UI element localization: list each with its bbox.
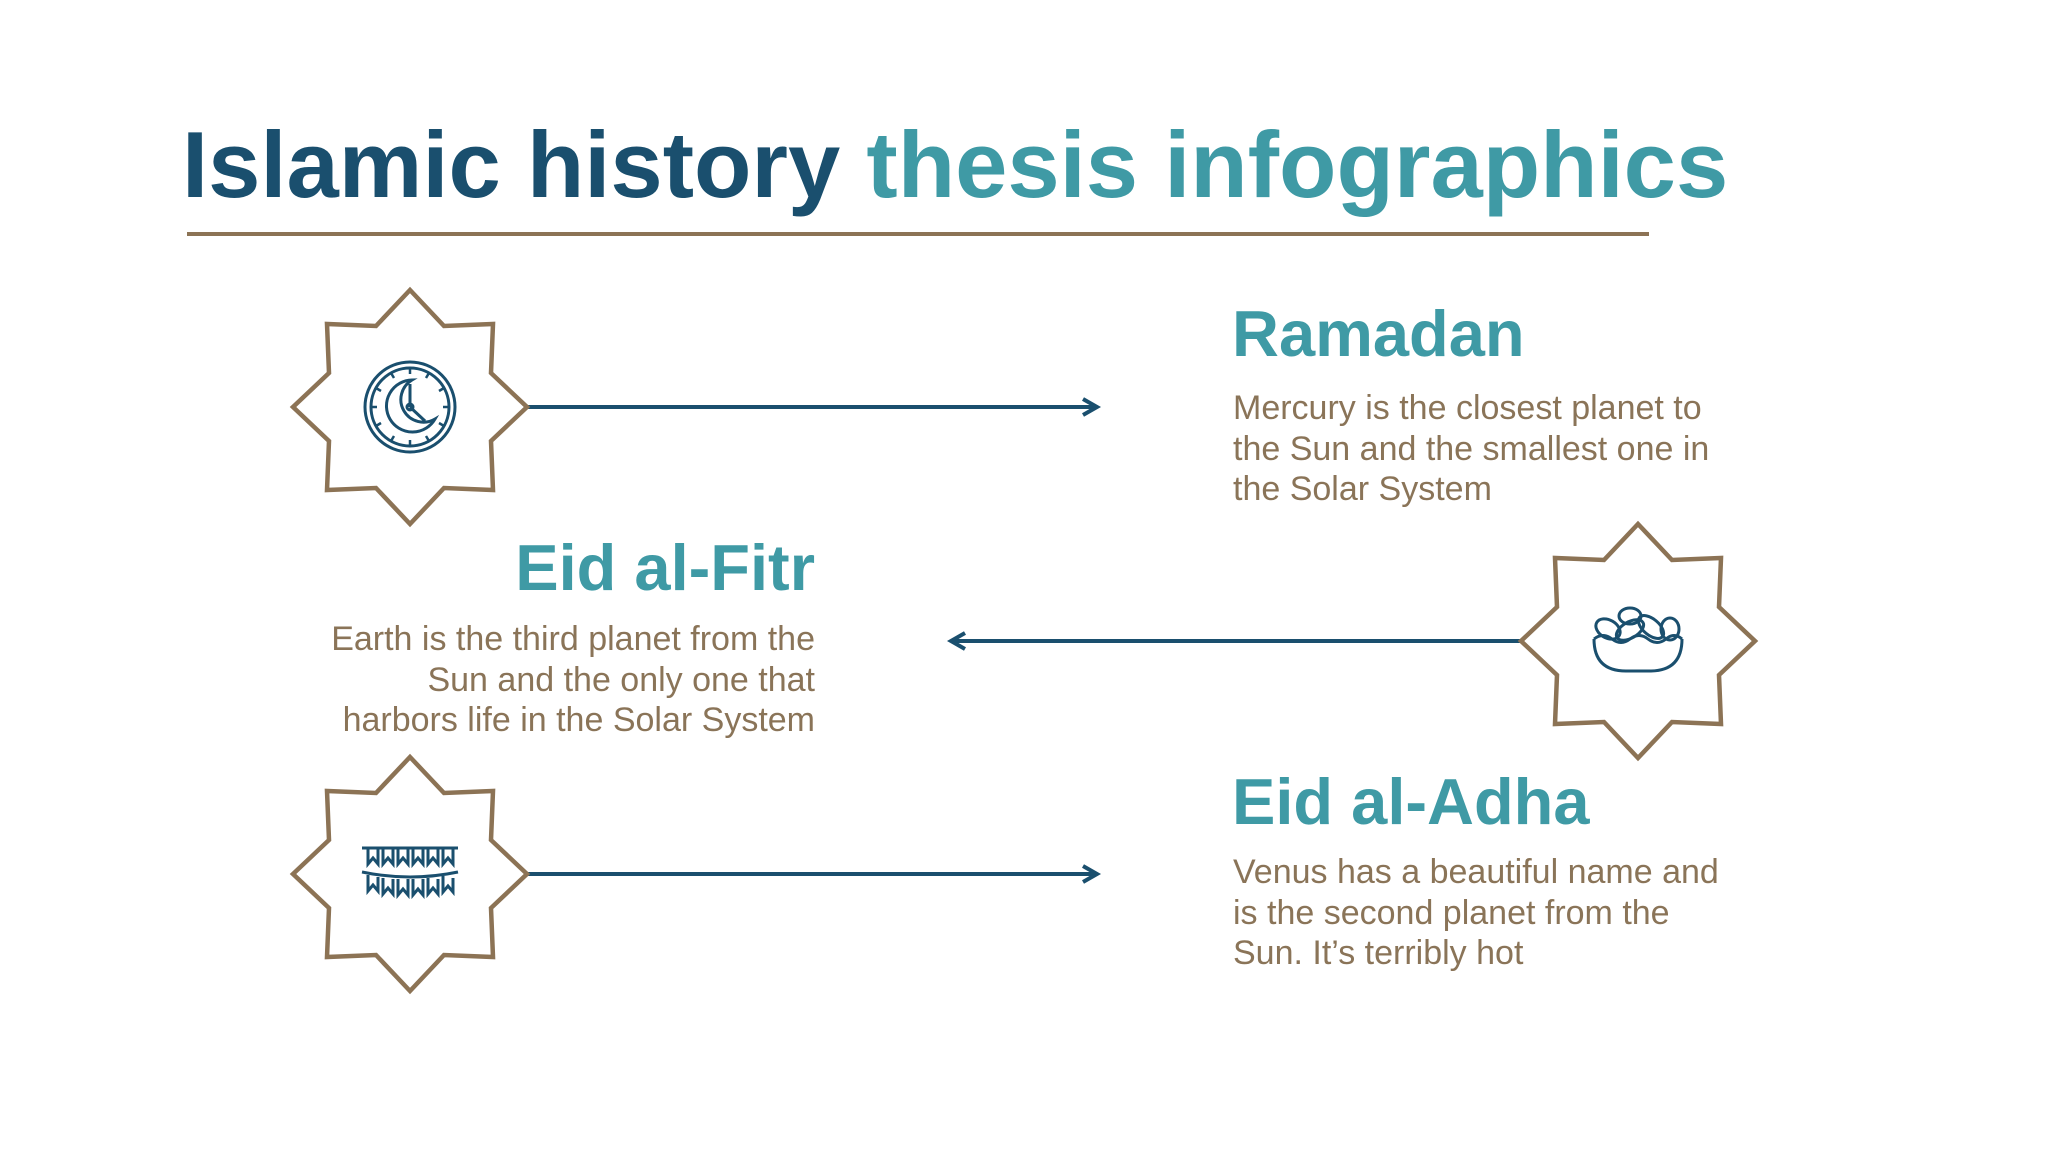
- star: bunting: [293, 757, 527, 991]
- text: Eid al-Fitr: [331, 620, 815, 739]
- text: Ramadan: Mercury is the closest planet to: [1233, 389, 1702, 427]
- heading: Eid al-Fitr: Eid al-Fitr: [515, 531, 815, 604]
- star: bowl: [1521, 524, 1755, 758]
- title underline: [187, 232, 1649, 236]
- text: Eid al-Adha: is the second planet from the: [1233, 894, 1670, 932]
- text: Eid al-Adha: [1233, 853, 1719, 972]
- heading: Eid al-Adha: Eid al-Adha: [1232, 765, 1590, 838]
- title: Islamic history thesis infographics: [182, 112, 1728, 217]
- heading: Ramadan: Ramadan: [1232, 297, 1525, 370]
- arrow: Ramadan: [528, 399, 1097, 415]
- text: Eid al-Fitr: harbors life in the Solar System: [343, 701, 815, 739]
- text: Ramadan: the Sun and the smallest one in: [1233, 430, 1709, 468]
- text: Eid al-Fitr: Earth is the third planet from the: [331, 620, 815, 658]
- arrow: Eid al-Fitr: [951, 633, 1521, 649]
- text: Eid al-Fitr: Sun and the only one that: [427, 660, 815, 698]
- star: clock: [293, 290, 527, 524]
- icon: crescent clock: [365, 362, 455, 452]
- text: Eid al-Adha: Venus has a beautiful name and: [1233, 853, 1719, 891]
- icon: bunting: [362, 848, 458, 895]
- text: Ramadan: the Solar System: [1233, 470, 1492, 508]
- icon: bowl of dates: [1592, 608, 1682, 671]
- text: Eid al-Adha: Sun. It’s terribly hot: [1233, 934, 1523, 972]
- text: Ramadan: [1233, 389, 1709, 508]
- arrow: Eid al-Adha: [528, 866, 1097, 882]
